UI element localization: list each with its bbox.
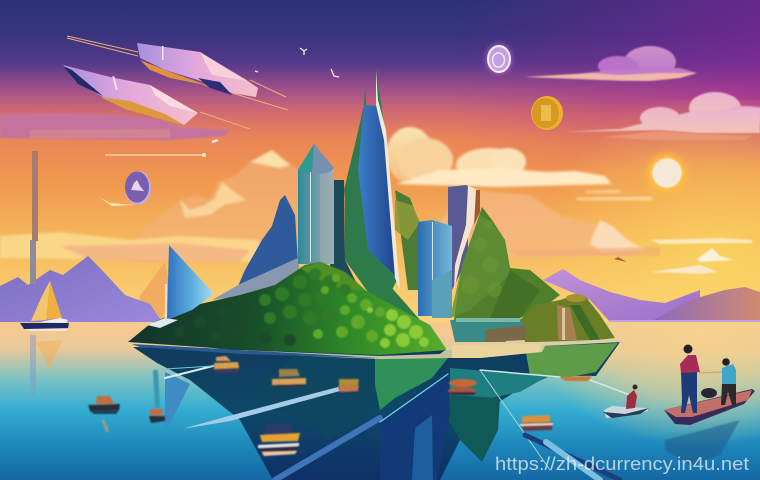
water reflection: distant sailboat bbox=[30, 335, 62, 395]
distant mountains: left bbox=[0, 256, 172, 322]
birds and sky specks bbox=[212, 48, 339, 142]
boat: large lower bbox=[258, 423, 300, 456]
person: blue shirt bbox=[721, 358, 736, 405]
watermark url: https://zh-dcurrency.in4u.net bbox=[495, 453, 749, 474]
boat: upper left bbox=[213, 356, 240, 373]
tower: left crystal tower bbox=[298, 144, 334, 264]
cloud band: left pink bbox=[0, 113, 230, 140]
main central cloud bbox=[386, 127, 652, 260]
tower pole bbox=[30, 151, 38, 284]
island reflection bbox=[133, 342, 620, 480]
right green hill bbox=[395, 200, 560, 320]
sailboat: large blue sail bbox=[147, 245, 214, 328]
water bbox=[0, 322, 760, 480]
sailboat: yellow bbox=[20, 281, 69, 331]
boat: moored far bbox=[560, 376, 592, 381]
coin: purple glowing bbox=[485, 43, 513, 75]
back clouds behind towers bbox=[0, 150, 300, 262]
small bird glider bbox=[614, 257, 627, 262]
distant mountains: right bbox=[543, 269, 760, 324]
boat: near glass left bbox=[448, 379, 477, 395]
coin: purple left bbox=[99, 171, 151, 206]
light streak bbox=[105, 153, 206, 157]
light beams on water bbox=[165, 324, 630, 480]
boat: middle bbox=[272, 369, 306, 387]
large boat reflection bbox=[665, 420, 740, 465]
boat: small pillar bbox=[149, 370, 165, 423]
ship: upper airship bbox=[67, 36, 288, 110]
cliff with waterfall bbox=[520, 294, 615, 342]
coin: gold bbox=[531, 96, 563, 130]
boat: left water bbox=[88, 396, 120, 432]
tower: central glass tower bbox=[418, 220, 452, 318]
large boat with two people bbox=[664, 344, 755, 425]
ship: lower airship bbox=[63, 65, 250, 129]
waterfront plaza and shore bbox=[132, 318, 622, 359]
boat: lower center bbox=[520, 415, 553, 431]
person: red jacket bbox=[680, 344, 700, 413]
sun bbox=[648, 154, 686, 192]
tower: tall blue spire bbox=[344, 70, 400, 290]
ferry boats bbox=[88, 356, 592, 456]
main green island bbox=[128, 262, 447, 355]
sky background bbox=[0, 0, 760, 330]
main island hill behind bbox=[212, 180, 420, 320]
boat: right of middle bbox=[338, 379, 359, 394]
right sky wisps and small clouds bbox=[510, 238, 752, 274]
upper right purple cloud bbox=[525, 46, 697, 81]
small boat with seated figure bbox=[603, 384, 649, 418]
tower: back dark tower and curve bbox=[448, 185, 480, 290]
right pink cloud bbox=[563, 92, 760, 140]
